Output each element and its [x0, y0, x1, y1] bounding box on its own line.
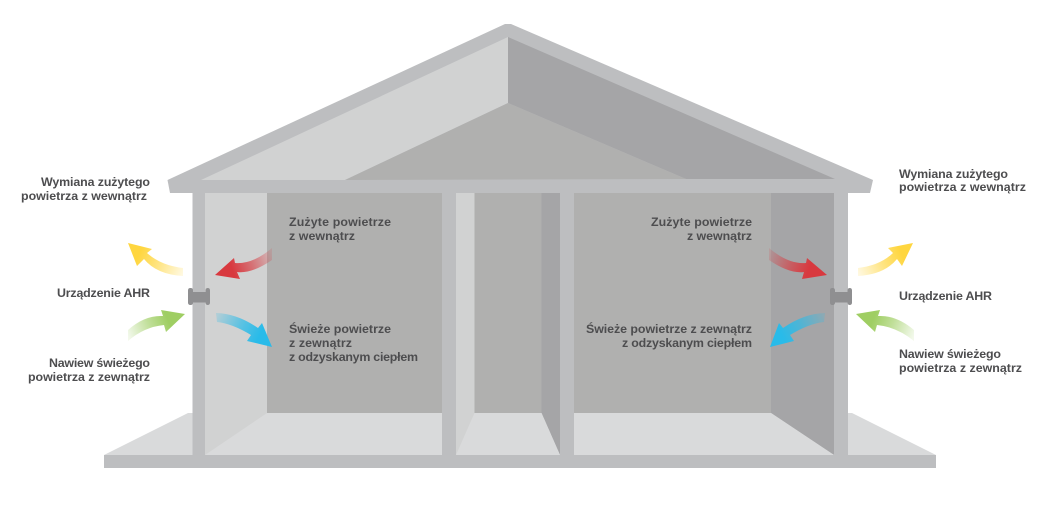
arrow: left green intake: [128, 310, 185, 341]
label: left exhaust: powietrza z wewnątrz: [21, 189, 147, 203]
label: right fresh air: Świeże powietrze z zewnątrz: [586, 321, 752, 336]
icon: left AHR unit: [188, 288, 210, 305]
label: right intake: [899, 347, 1022, 375]
label: right extract air: Zużyte powietrze: [651, 215, 752, 229]
arrow: right green intake: [856, 310, 914, 341]
label: left intake: [28, 356, 150, 384]
arrow: left red extract: [215, 248, 272, 279]
arrow: left yellow exhaust: [128, 243, 183, 276]
floor slab: [104, 413, 936, 468]
wall posts: [192, 193, 848, 455]
label: left fresh air: [289, 321, 418, 364]
label: left extract air: z wewnątrz: [289, 229, 355, 243]
label: right fresh air: [586, 321, 752, 350]
label: left exhaust: Wymiana zużytego: [41, 175, 150, 189]
label: right exhaust: Wymiana zużytego: [899, 167, 1008, 181]
house: [104, 24, 936, 468]
icon: right AHR unit: [830, 288, 852, 305]
left room: [205, 193, 442, 455]
label: right intake: powietrza z zewnątrz: [899, 361, 1022, 375]
arrow: right red extract: [769, 248, 827, 279]
label: left AHR: Urządzenie AHR: [57, 286, 150, 300]
label: left extract air: [289, 215, 391, 243]
label: left extract air: Zużyte powietrze: [289, 215, 391, 229]
label: right intake: Nawiew świeżego: [899, 347, 1001, 361]
label: left fresh air: z zewnątrz: [289, 336, 352, 350]
label: left exhaust: [21, 175, 150, 203]
label: right exhaust: powietrza z wewnątrz: [899, 180, 1026, 194]
label: right extract air: [651, 215, 752, 243]
roof: [168, 24, 873, 193]
label: right AHR: Urządzenie AHR: [899, 289, 992, 303]
label: left intake: powietrza z zewnątrz: [28, 370, 150, 384]
arrow: right yellow exhaust: [858, 243, 913, 276]
label: right fresh air: z odzyskanym ciepłem: [622, 336, 752, 350]
centre room: [456, 193, 560, 455]
label: left fresh air: z odzyskanym ciepłem: [289, 350, 418, 364]
right room: [574, 193, 834, 455]
label: right extract air: z wewnątrz: [687, 229, 752, 243]
label: right exhaust: [899, 167, 1026, 194]
arrow: left blue supply: [216, 313, 272, 347]
label: left fresh air: Świeże powietrze: [289, 321, 391, 336]
label: left intake: Nawiew świeżego: [49, 356, 150, 370]
arrow: right blue supply: [770, 313, 825, 347]
